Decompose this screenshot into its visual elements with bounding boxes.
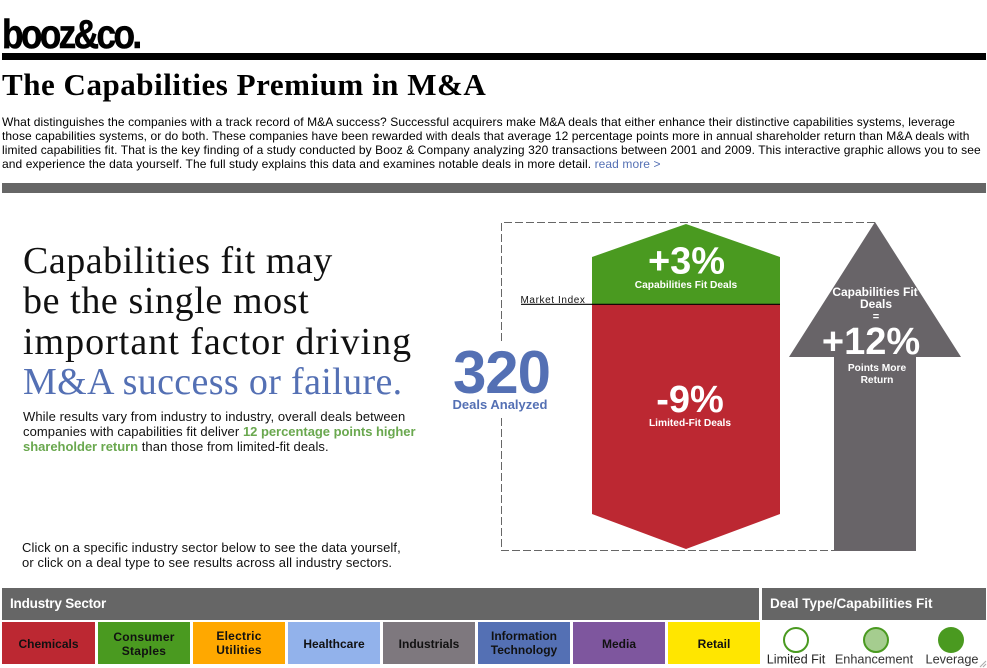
gray divider bar	[2, 183, 986, 193]
green shape: capabilities fit deals: +3%	[648, 240, 725, 282]
legend item: leverage	[926, 627, 978, 666]
sector tile: consumer staples	[98, 622, 190, 664]
industry sector header	[2, 588, 759, 620]
sector tile: electric utilities: Electric	[216, 629, 262, 643]
title: The Capabilities Premium in M&A	[2, 67, 486, 102]
green shape: capabilities fit deals: Capabilities Fit Deals	[635, 280, 738, 291]
sector tile: industrials	[383, 622, 475, 664]
instruction text: or click on a deal type to see results across all industry sectors.	[22, 555, 392, 570]
sector tile: chemicals: Chemicals	[18, 636, 79, 650]
sector tile: electric utilities	[193, 622, 285, 664]
black header rule	[2, 53, 986, 60]
instruction text	[22, 540, 401, 570]
main heading: M&A success or failure.	[23, 361, 403, 403]
green shape: capabilities fit deals	[592, 224, 780, 304]
deal type header	[762, 588, 986, 620]
sector tile: retail	[668, 622, 760, 664]
intro paragraph: those capabilities systems, or do both. These companies have been rewarded with deals that average 12 percentage points more in annual shareholder return than M&A deals with	[2, 129, 970, 143]
gray arrow: +12%: Deals	[860, 297, 892, 311]
main heading	[23, 240, 412, 403]
sector tile: healthcare: Healthcare	[303, 636, 365, 650]
gray arrow: +12%: Capabilities Fit	[832, 285, 918, 299]
red shape: limited-fit deals	[592, 304, 780, 549]
sector tile: information technology: Information	[491, 629, 557, 643]
deal type header: Deal Type/Capabilities Fit	[770, 596, 933, 611]
deal count: 320: 320	[453, 339, 550, 406]
red shape: limited-fit deals: Limited-Fit Deals	[649, 418, 731, 429]
supporting text: shareholder return than those from limited-fit deals.	[23, 439, 329, 454]
legend item: limited fit: Limited Fit	[767, 652, 826, 666]
main heading: be the single most	[23, 280, 309, 322]
sector tile: consumer staples: Staples	[122, 644, 166, 658]
deal count: 320: Deals Analyzed	[453, 397, 547, 412]
main heading: important factor driving	[23, 321, 412, 363]
sector tile: chemicals	[2, 622, 95, 664]
main heading: Capabilities fit may	[23, 240, 333, 282]
gray arrow: +12%: Return	[861, 375, 893, 386]
supporting text	[23, 409, 416, 454]
sector tile: industrials: Industrials	[399, 636, 459, 650]
intro paragraph	[2, 115, 981, 171]
intro paragraph: and experience the data yourself. The full study explains this data and examines notable deals in more detail. read more >	[2, 157, 661, 171]
gray arrow: +12%: +12%	[822, 321, 920, 363]
red shape: limited-fit deals: -9%	[656, 379, 724, 421]
sector tile: electric utilities: Utilities	[216, 643, 262, 657]
gray arrow: +12%	[789, 222, 961, 551]
legend item: enhancement	[835, 628, 914, 666]
supporting text: companies with capabilities fit deliver 12 percentage points higher	[23, 424, 416, 439]
intro paragraph: What distinguishes the companies with a track record of M&A success? Successful acquirers make M&A deals that either enhance their distinctive capabilities systems, leverage	[2, 115, 955, 129]
legend item: limited fit	[767, 628, 826, 666]
deal type legend	[767, 627, 978, 666]
sector tile: healthcare	[288, 622, 380, 664]
legend item: leverage: Leverage	[926, 652, 978, 666]
intro paragraph: limited capabilities fit. That is the key finding of a study conducted by Booz & Company analyzing 320 transactions between 2001 and 2009. This interactive graphic allows you to see	[2, 143, 981, 157]
sector tile: information technology: Technology	[491, 643, 557, 657]
supporting text: While results vary from industry to industry, overall deals between	[23, 409, 405, 424]
sector tile: retail: Retail	[698, 636, 730, 650]
sector tile: information technology	[478, 622, 570, 664]
legend item: enhancement: Enhancement	[835, 652, 914, 666]
gray arrow: +12%: Points More	[848, 363, 906, 374]
instruction text: Click on a specific industry sector below to see the data yourself,	[22, 540, 401, 555]
sector tile: media	[573, 622, 665, 664]
sector tile: consumer staples: Consumer	[113, 630, 175, 644]
industry sector header: Industry Sector	[10, 596, 106, 611]
gray arrow: +12%: =	[873, 311, 879, 323]
market index line and label: Market Index	[520, 295, 586, 306]
sector tile: media: Media	[602, 636, 636, 650]
